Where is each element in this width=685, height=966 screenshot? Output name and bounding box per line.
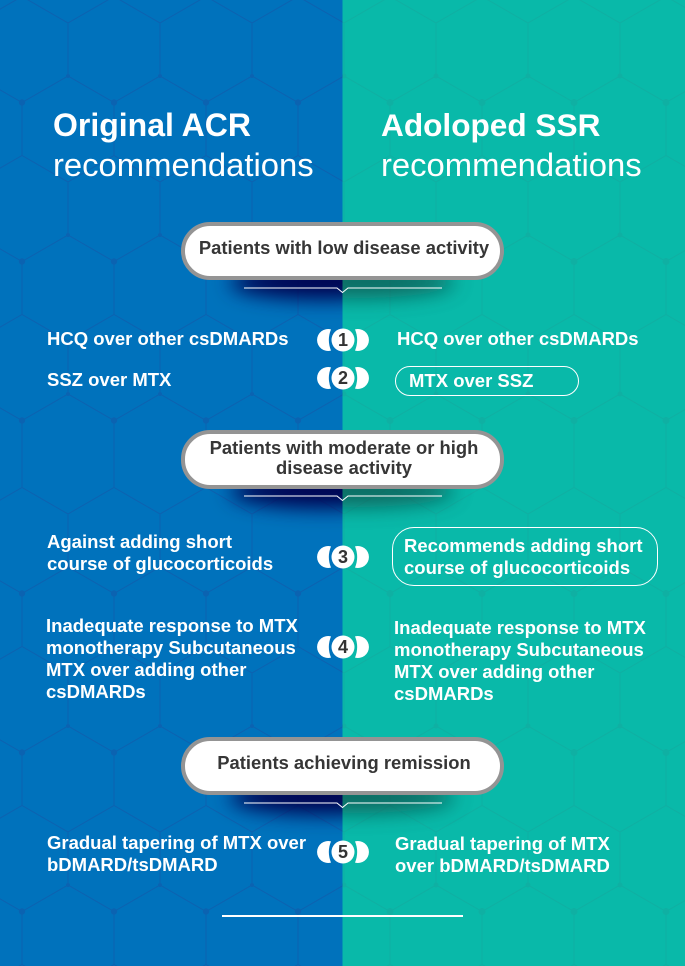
row 3 right outlined box: Recommends adding short	[404, 535, 642, 556]
row 2 left text: SSZ over MTX	[47, 369, 171, 390]
number badge 4: 4	[338, 637, 348, 657]
row 4 left text: MTX over adding other	[46, 659, 246, 680]
number badge 3	[317, 546, 369, 568]
row 3 right outlined box: course of glucocorticoids	[404, 557, 630, 578]
row 2 right outlined box	[395, 366, 579, 396]
row 1 left text: HCQ over other csDMARDs	[47, 328, 289, 349]
row 4 left text: monotherapy Subcutaneous	[46, 637, 296, 658]
row 3 left text: course of glucocorticoids	[47, 553, 273, 574]
row 3 left text: Against adding short	[47, 531, 232, 552]
row 4 right text: monotherapy Subcutaneous	[394, 639, 644, 660]
pill: Patients with moderate or high disease activity	[181, 430, 504, 489]
bottom rule	[222, 915, 463, 917]
row 4 left text	[46, 615, 298, 702]
pill: Patients with moderate or high disease activity: disease activity	[276, 457, 412, 478]
number badge 1: 1	[338, 330, 348, 350]
row 2 right outlined box: MTX over SSZ	[409, 370, 533, 391]
heading: Adoloped SSR recommendations	[381, 107, 642, 183]
heading: Original ACR recommendations: Original ACR	[53, 107, 251, 143]
number badge 3: 3	[338, 547, 348, 567]
heading: Adoloped SSR recommendations: Adoloped SSR	[381, 107, 600, 143]
pill: Patients with low disease activity	[181, 222, 504, 280]
shadows and brackets beneath section pills	[221, 280, 461, 828]
row 4 right text	[394, 617, 646, 704]
row 3 left text	[47, 531, 273, 574]
row 5 left text	[47, 832, 306, 875]
heading: Original ACR recommendations: recommendations	[53, 146, 314, 183]
number badge 5: 5	[338, 842, 348, 862]
row 4 left text: Inadequate response to MTX	[46, 615, 298, 636]
pill: Patients with low disease activity: Patients with low disease activity	[199, 237, 489, 258]
number badge 2	[317, 366, 369, 390]
pill: Patients achieving remission	[181, 737, 504, 795]
row 4 right text: Inadequate response to MTX	[394, 617, 646, 638]
pill: Patients achieving remission: Patients achieving remission	[217, 752, 471, 773]
row 5 left text: Gradual tapering of MTX over	[47, 832, 306, 853]
heading: Original ACR recommendations	[53, 107, 314, 183]
row 4 left text: csDMARDs	[46, 681, 146, 702]
row 3 right outlined box	[392, 527, 658, 586]
number badge 5	[317, 840, 369, 864]
heading: Adoloped SSR recommendations: recommendations	[381, 146, 642, 183]
row 4 right text: csDMARDs	[394, 683, 494, 704]
row 5 left text: bDMARD/tsDMARD	[47, 854, 218, 875]
number badge 2: 2	[338, 368, 348, 388]
number badge 4	[317, 636, 369, 658]
row 4 right text: MTX over adding other	[394, 661, 594, 682]
row 5 right text: Gradual tapering of MTX	[395, 833, 610, 854]
row 1 right text: HCQ over other csDMARDs	[397, 328, 639, 349]
row 5 right text: over bDMARD/tsDMARD	[395, 855, 610, 876]
row 5 right text	[395, 833, 610, 876]
pill: Patients with moderate or high disease activity: Patients with moderate or high	[210, 437, 478, 458]
number badge 1	[317, 328, 369, 352]
